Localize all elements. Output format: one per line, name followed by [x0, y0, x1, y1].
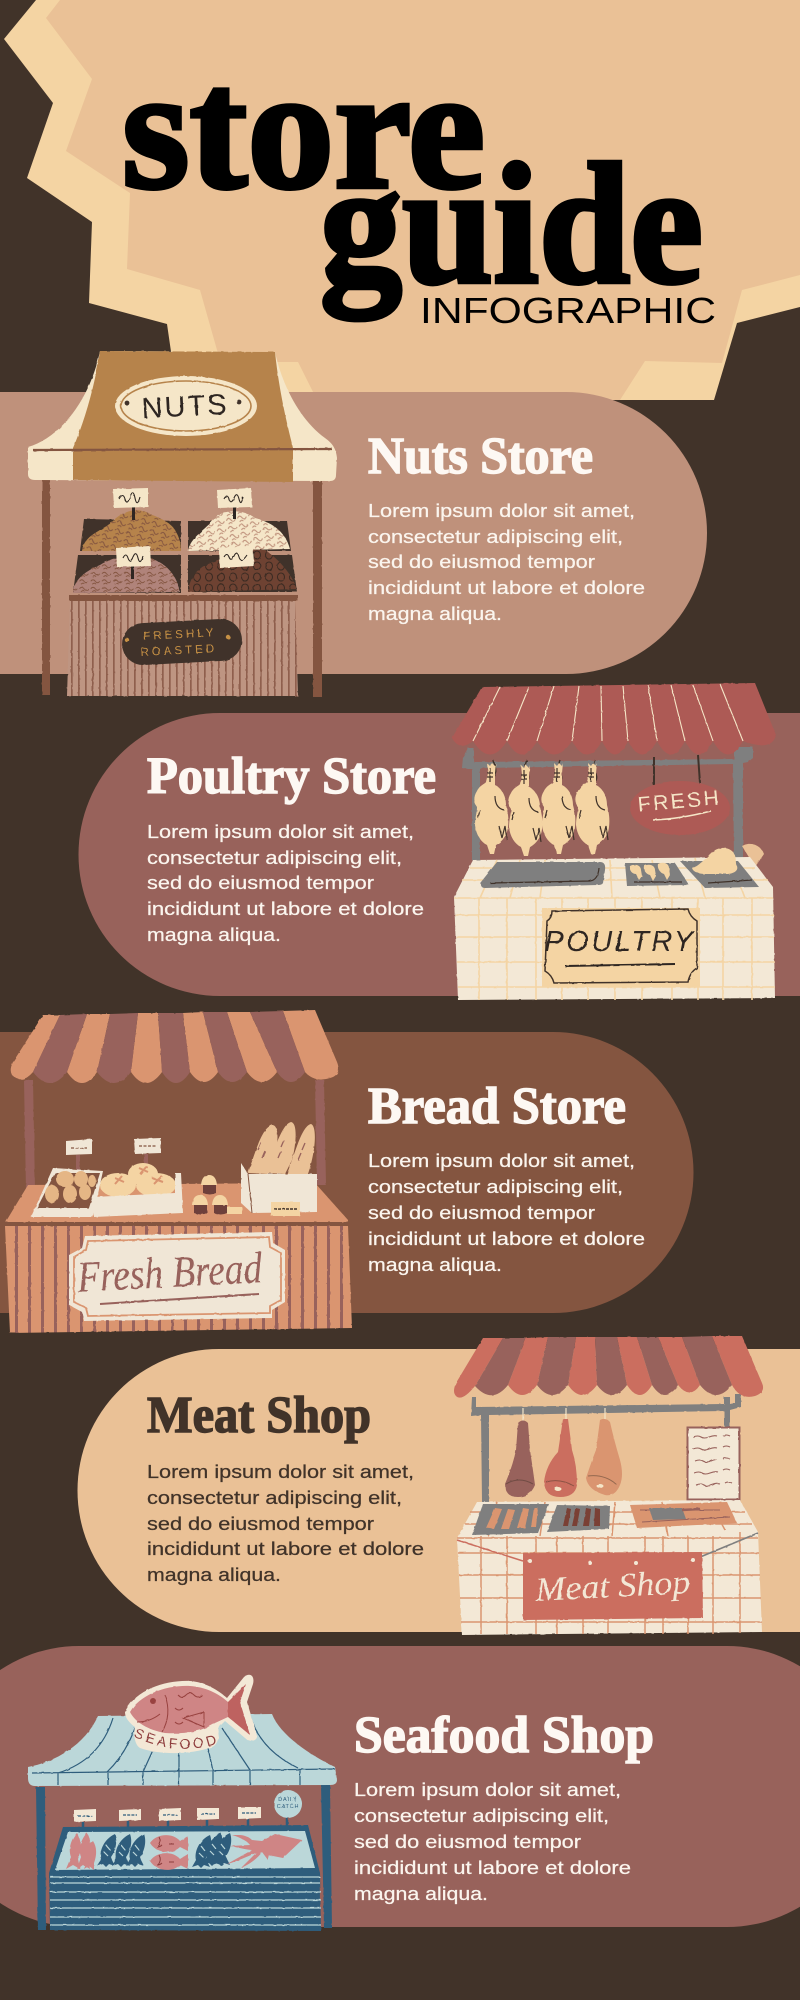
fresh bread sign [69, 1232, 285, 1321]
text block: seafood shop [354, 1779, 631, 1904]
panel background: poultry [79, 713, 800, 996]
awning cream [28, 351, 337, 481]
heading: bread store: Bread Store [368, 1078, 626, 1135]
counter [457, 1500, 762, 1635]
panel background: nuts [0, 392, 707, 674]
meat shop sign [457, 1533, 758, 1620]
jam jars [192, 1175, 242, 1214]
panel: poultry store [79, 713, 800, 996]
text block: meat shop: magna aliqua. [147, 1564, 281, 1585]
posts [24, 1080, 326, 1190]
poultry sign: POULTRY [544, 926, 696, 958]
text block: bread store: incididunt ut labore et dolore [368, 1228, 645, 1249]
text block: seafood shop: sed do eiusmod tempor [354, 1831, 581, 1852]
frame [462, 747, 753, 863]
awning [11, 1010, 338, 1083]
text block: nuts store: sed do eiusmod tempor [368, 551, 595, 572]
fish on ice [66, 1833, 302, 1870]
text block: bread store: sed do eiusmod tempor [368, 1202, 595, 1223]
stall illustration: seafood [28, 1674, 337, 1932]
text block: poultry store [147, 821, 424, 945]
text block: poultry store: magna aliqua. [147, 924, 281, 945]
text block: meat shop [147, 1461, 424, 1585]
text block: nuts store: magna aliqua. [368, 603, 502, 624]
text block: poultry store: incididunt ut labore et dolore [147, 898, 424, 919]
text block: meat shop: Lorem ipsum dolor sit amet, [147, 1461, 414, 1482]
awning brown centre [73, 351, 293, 482]
daily catch tag [274, 1790, 302, 1818]
display case [49, 1825, 321, 1931]
panel: meat shop [77, 1349, 800, 1632]
text block: poultry store: Lorem ipsum dolor sit amet, [147, 821, 414, 842]
title word: store: store [122, 34, 485, 225]
text block: meat shop: sed do eiusmod tempor [147, 1513, 374, 1534]
text block: bread store: magna aliqua. [368, 1254, 502, 1275]
panel: seafood shop [0, 1646, 800, 1927]
labels [74, 1807, 287, 1828]
panel: nuts store [0, 392, 707, 674]
cutting board [630, 1502, 737, 1528]
poultry sign [542, 908, 700, 987]
text block: seafood shop: magna aliqua. [354, 1883, 488, 1904]
bun tray [31, 1168, 103, 1217]
text block: nuts store [368, 500, 645, 624]
burst shape: tan front layer [46, 0, 800, 400]
nut labels [113, 488, 254, 579]
baguettes [248, 1122, 315, 1174]
nut piles [73, 510, 297, 593]
stall illustration: bread [5, 1010, 352, 1333]
counter front [5, 1222, 352, 1333]
stall posts [42, 480, 322, 697]
fresh bread sign: Fresh Bread [75, 1243, 264, 1302]
round item [742, 844, 764, 867]
stall illustration: meat [454, 1336, 763, 1635]
awning line [33, 449, 332, 450]
meat trays [472, 1504, 610, 1535]
text block: bread store: consectetur adipiscing elit, [368, 1176, 623, 1197]
trays [481, 861, 759, 888]
panel background: meat [77, 1349, 800, 1632]
heading: meat shop: Meat Shop [147, 1387, 371, 1444]
counter [454, 857, 775, 1000]
text block: bread store: Lorem ipsum dolor sit amet, [368, 1150, 635, 1171]
burst shape: pale back layer [4, 0, 800, 400]
text block: poultry store: sed do eiusmod tempor [147, 872, 374, 893]
fish sign: SEAFOOD [134, 1729, 216, 1749]
bread loaves box [93, 1163, 183, 1217]
text block: nuts store: consectetur adipiscing elit, [368, 526, 623, 547]
daily catch tag: CATCH [277, 1804, 299, 1810]
heading: seafood shop: Seafood Shop [354, 1707, 654, 1764]
fresh sign [630, 755, 730, 835]
text block: nuts store: Lorem ipsum dolor sit amet, [368, 500, 635, 521]
frame [471, 1394, 741, 1502]
panel: bread store [0, 1032, 694, 1313]
stall illustration: poultry [452, 683, 776, 1000]
text block: seafood shop: Lorem ipsum dolor sit amet, [354, 1779, 621, 1800]
awning [454, 1336, 763, 1398]
hanging chickens [474, 760, 609, 856]
sign: freshly roasted [121, 618, 243, 666]
fish sign [125, 1674, 257, 1754]
text block: nuts store: incididunt ut labore et dolore [368, 577, 645, 598]
posts [36, 1785, 332, 1930]
counter top [5, 1183, 348, 1226]
sign: freshly roasted: ROASTED [140, 643, 217, 659]
hams [505, 1419, 622, 1497]
text block: seafood shop: incididunt ut labore et dolore [354, 1857, 631, 1878]
heading: nuts store: Nuts Store [368, 428, 593, 485]
title [122, 34, 716, 331]
subtitle: INFOGRAPHIC [420, 290, 716, 331]
panel background: bread [0, 1032, 694, 1313]
awning [28, 1714, 337, 1786]
panel background: seafood [0, 1646, 800, 1927]
chicken pieces [630, 848, 737, 881]
text block: meat shop: consectetur adipiscing elit, [147, 1487, 402, 1508]
title word: guide: guide [320, 129, 703, 320]
awning [452, 683, 776, 754]
trays [73, 519, 297, 593]
nuts sign: NUTS [141, 389, 229, 425]
bread labels [66, 1138, 161, 1173]
heading: poultry store: Poultry Store [147, 748, 436, 805]
text block: seafood shop: consectetur adipiscing elit, [354, 1805, 609, 1826]
sign: freshly roasted: FRESHLY [143, 627, 217, 643]
text block: poultry store: consectetur adipiscing elit, [147, 847, 402, 868]
nuts sign [115, 376, 257, 436]
meat shop sign: Meat Shop [533, 1564, 691, 1609]
stall illustration: nuts [28, 351, 337, 697]
counter [67, 595, 298, 696]
text block: bread store [368, 1150, 645, 1275]
text block: meat shop: incididunt ut labore et dolore [147, 1538, 424, 1559]
fresh sign: FRESH [637, 786, 722, 817]
baguette box [241, 1163, 317, 1216]
daily catch tag: DAILY [278, 1797, 298, 1803]
strings [523, 1408, 605, 1421]
menu board [688, 1428, 740, 1500]
